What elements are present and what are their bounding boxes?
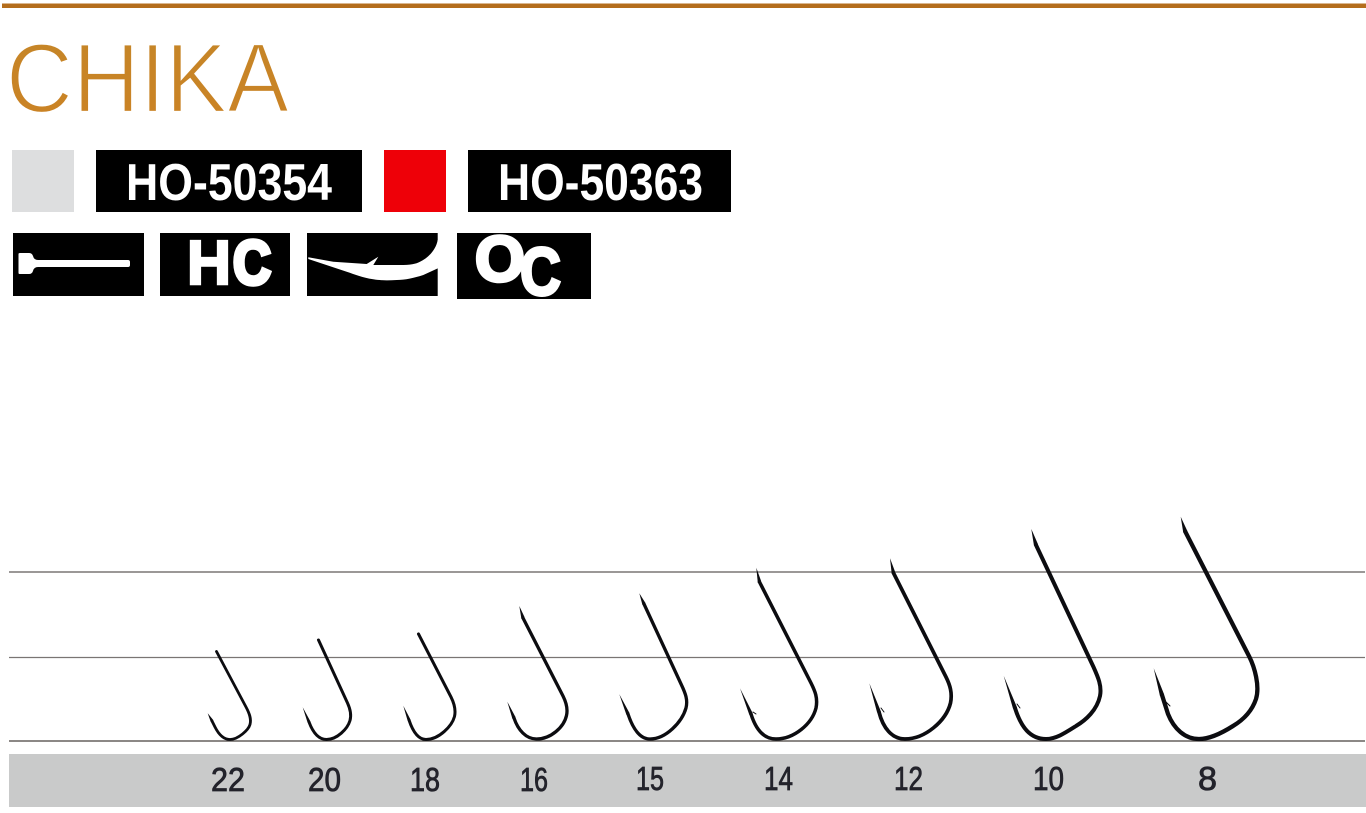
icon: offset eye OC: O	[475, 223, 525, 295]
label: 20: 20	[308, 761, 341, 798]
hook: size 10	[1004, 529, 1101, 739]
label: 22: 22	[211, 761, 245, 798]
hook: size 8	[1154, 517, 1257, 739]
icon: offset eye OC	[457, 223, 591, 310]
hook: size 15	[619, 593, 687, 739]
size labels	[211, 760, 1217, 798]
top rule	[2, 4, 1366, 8]
icon: high carbon HC: C	[233, 229, 271, 298]
icon: barbed point	[307, 233, 438, 296]
product code: HO-50363: HO-50363	[498, 154, 703, 212]
hook: size 20	[303, 640, 351, 740]
guide line: base	[9, 740, 1365, 742]
label: 10: 10	[1033, 760, 1064, 797]
label: 12: 12	[894, 760, 923, 797]
icon: high carbon HC: H	[187, 229, 231, 298]
label: 16: 16	[520, 761, 548, 798]
hook: size 18	[403, 634, 455, 740]
title: CHIKA	[6, 23, 290, 133]
icon: offset eye OC: C	[520, 234, 561, 310]
product code: HO-50354: HO-50354	[126, 154, 332, 212]
colour swatch: grey	[12, 150, 74, 212]
label: 14: 14	[764, 760, 793, 797]
icon: spade-end shank	[13, 233, 144, 296]
label: 15: 15	[636, 760, 664, 797]
label: 18: 18	[410, 761, 440, 798]
colour swatch: red	[384, 150, 446, 212]
guide line: upper	[9, 571, 1365, 573]
guide line: middle	[9, 656, 1365, 658]
size band	[9, 754, 1366, 807]
hook: size 14	[740, 568, 817, 739]
icon: high carbon HC	[160, 229, 290, 298]
hook: size 12	[869, 558, 951, 739]
hook: size 16	[507, 606, 567, 739]
hook: size 22	[208, 652, 251, 740]
label: 8: 8	[1198, 760, 1217, 797]
